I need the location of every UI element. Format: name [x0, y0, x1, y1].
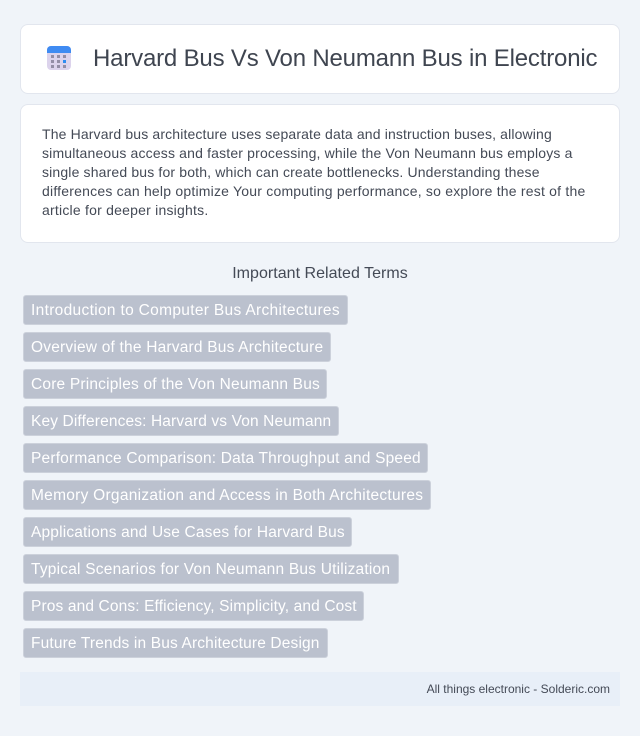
summary text: The Harvard bus architecture uses separate data and instruction buses, allowing: [42, 126, 552, 142]
term 1: [23, 295, 348, 325]
term 6: [23, 480, 431, 510]
term 1: Introduction to Computer Bus Architectures: [31, 302, 340, 319]
summary text: single shared bus for both, which can create bottlenecks. Understanding these: [42, 164, 540, 180]
summary text: article for deeper insights.: [42, 202, 208, 218]
term 7: [23, 517, 352, 547]
term 9: [23, 591, 364, 621]
summary text: [42, 126, 585, 218]
term 8: Typical Scenarios for Von Neumann Bus Utilization: [31, 561, 390, 578]
term 8: [23, 554, 399, 584]
icon: calendar: [47, 46, 71, 70]
summary text: simultaneous access and faster processing, while the Von Neumann bus employs a: [42, 145, 573, 161]
related terms heading: Important Related Terms: [232, 265, 408, 282]
footer text: All things electronic - Solderic.com: [427, 682, 610, 696]
term 6: Memory Organization and Access in Both Architectures: [31, 487, 423, 504]
term 10: [23, 628, 328, 658]
term 9: Pros and Cons: Efficiency, Simplicity, and Cost: [31, 598, 357, 615]
summary card: [20, 104, 620, 243]
term 10: Future Trends in Bus Architecture Design: [31, 635, 320, 652]
term list: [23, 295, 431, 658]
title: Harvard Bus Vs Von Neumann Bus in Electronic: [93, 45, 597, 72]
term 4: [23, 406, 339, 436]
summary text: differences can help optimize Your computing performance, so explore the rest of the: [42, 183, 585, 199]
term 3: Core Principles of the Von Neumann Bus: [31, 376, 320, 393]
term 7: Applications and Use Cases for Harvard Bus: [31, 524, 345, 541]
header card: [20, 24, 620, 94]
footer bar: [20, 672, 620, 706]
term 5: [23, 443, 428, 473]
term 5: Performance Comparison: Data Throughput and Speed: [31, 450, 421, 467]
term 3: [23, 369, 327, 399]
term 2: [23, 332, 331, 362]
term 4: Key Differences: Harvard vs Von Neumann: [31, 413, 331, 430]
term 2: Overview of the Harvard Bus Architecture: [31, 339, 323, 356]
